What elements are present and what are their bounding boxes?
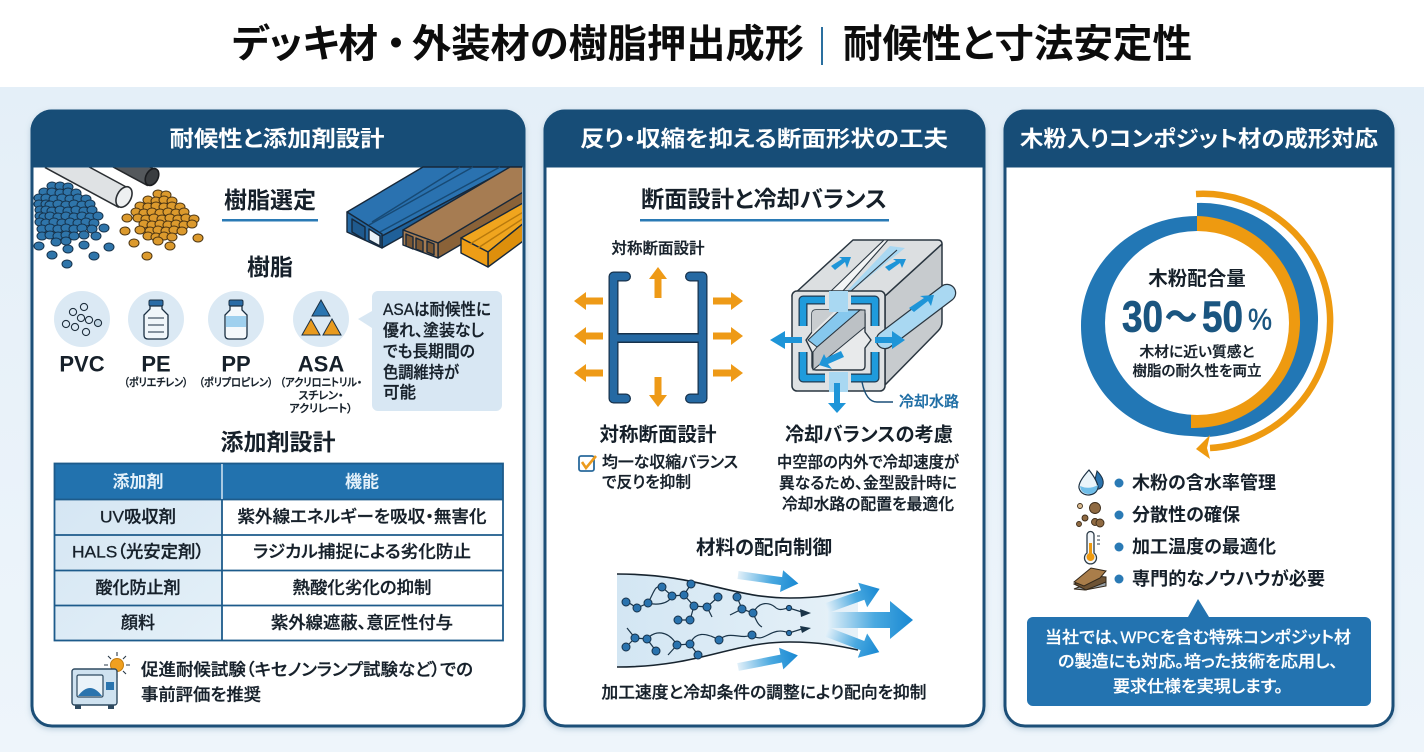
icon: ASA triangles: スチレン・ — [298, 389, 343, 402]
header: panel 3 — [1005, 111, 1393, 166]
table header: 添加剤 — [112, 472, 164, 492]
text: symmetric section note: で反りを抑制 — [602, 474, 691, 492]
label: cooling water channel — [862, 382, 959, 410]
title: left part — [232, 22, 804, 66]
title: left part: ・ — [386, 24, 406, 66]
label: PE: PE — [141, 352, 171, 376]
text: weathering test recommendation: 促進耐候試験（キセノンランプ試験など）での — [141, 660, 473, 680]
illustration: blue resin pellets — [34, 182, 114, 268]
row: antioxidant: 熱酸化劣化の抑制 — [292, 578, 432, 598]
heading: material orientation control: 材料の配向制御 — [696, 537, 832, 559]
text: ring note: 木材に近い質感と — [1140, 343, 1254, 361]
panel: wood plastic composite — [1005, 111, 1393, 726]
text: weathering test recommendation: 事前評価を推奨 — [141, 686, 261, 704]
icon: PP bottle: （ポリプロピレン） — [199, 376, 273, 389]
icon: ASA triangles: アクリレート） — [289, 402, 353, 415]
text: cooling balance note: 冷却水路の配置を最適化 — [782, 496, 954, 514]
label: PP: PP — [221, 352, 251, 376]
icon: PE bottle: （ポリエチレン） — [124, 376, 188, 389]
text: dispersion: 分散性の確保 — [1132, 505, 1240, 525]
value: 30 to 50 percent: 50 — [1202, 292, 1243, 342]
label: ASA: ASA — [298, 352, 344, 376]
heading: resin: 樹脂 — [247, 254, 293, 280]
chart: wood content ring — [1081, 194, 1330, 459]
title: left part: 外装材の樹脂押出成形 — [412, 24, 804, 66]
text: ring note — [1132, 343, 1262, 380]
icon: check — [579, 456, 596, 471]
row: HALS — [72, 542, 471, 562]
text: ring label: 木粉配合量 — [1148, 268, 1246, 290]
label: cooling water channel: 冷却水路 — [899, 394, 959, 410]
text: symmetric section note: 均一な収縮バランス — [602, 454, 738, 472]
illustration: extruded profiles — [347, 167, 530, 267]
text: orientation note: 加工速度と冷却条件の調整により配向を抑制 — [602, 683, 926, 702]
arrows: cooling flow — [770, 257, 934, 413]
title: right part: 耐候性と寸法安定性 — [843, 24, 1192, 66]
row: pigment: 顔料 — [121, 614, 155, 632]
row: UV absorber: 紫外線エネルギーを吸収・無害化 — [238, 508, 486, 526]
list: key points — [1074, 470, 1325, 590]
text: cooling balance note: 中空部の内外で冷却速度が — [777, 452, 959, 472]
diagram: cooling channel block — [792, 240, 947, 392]
value: 30 to 50 percent: 〜 — [1165, 296, 1197, 338]
heading: symmetric section design: 対称断面設計 — [599, 423, 717, 446]
heading: section design and cooling balance: 断面設計と冷却バランス — [641, 186, 887, 212]
arrow: orange outer arc — [1196, 194, 1330, 459]
callout: company capability: の製造にも対応。培った技術を応用し、 — [1058, 652, 1338, 671]
row: UV absorber — [100, 508, 486, 526]
icon: particles — [1076, 502, 1104, 527]
illustration: orange resin pellets — [120, 190, 203, 260]
value: 30 to 50 percent: 30 — [1122, 292, 1163, 342]
heading: additive design: 添加剤設計 — [220, 429, 336, 455]
text: know-how: 専門的なノウハウが必要 — [1132, 568, 1325, 589]
row: antioxidant — [96, 578, 432, 598]
panel: cross-section design — [545, 111, 984, 726]
icon: composite boards — [1074, 568, 1106, 590]
illustration: resin rods — [50, 150, 162, 210]
icon: PVC — [54, 291, 110, 376]
callout: company capability: 当社では、WPCを含む特殊コンポジット材 — [1045, 628, 1351, 647]
header: panel 1 — [32, 111, 524, 166]
table: additives — [54, 464, 503, 641]
row: UV absorber: UV吸収剤 — [100, 508, 176, 526]
callout: ASA note: でも長期間の — [383, 342, 475, 361]
text: symmetric section note — [602, 454, 738, 492]
header: panel 2 — [545, 111, 984, 166]
arrows: shrinkage directions — [574, 267, 743, 407]
callout: ASA note: 可能 — [383, 383, 416, 402]
arrows: material flow — [736, 564, 913, 678]
text: cooling balance note — [777, 452, 959, 514]
text: cooling balance note: 異なるため、金型設計時に — [779, 474, 957, 492]
icon: water drops — [1079, 470, 1103, 495]
icon: PE bottle — [124, 291, 188, 389]
callout: ASA note — [358, 291, 502, 411]
text: ring note: 樹脂の耐久性を両立 — [1132, 363, 1262, 380]
diagram: symmetric H profile — [613, 276, 703, 398]
table header — [112, 472, 379, 492]
text: moisture management: 木粉の含水率管理 — [1132, 472, 1276, 493]
icon: PP bottle — [199, 291, 273, 389]
row: HALS: ラジカル捕捉による劣化防止 — [253, 542, 471, 562]
header: panel 3: 木粉入りコンポジット材の成形対応 — [1020, 126, 1378, 152]
text: weathering test recommendation — [141, 660, 473, 704]
row: antioxidant: 酸化防止剤 — [96, 578, 180, 598]
icon: ASA triangles: （アクリロニトリル・ — [280, 376, 362, 389]
callout: company capability: 要求仕様を実現します。 — [1113, 677, 1283, 696]
callout: ASA note: 優れ、塗装なし — [383, 321, 484, 340]
callout: ASA note: 色調維持が — [383, 362, 460, 382]
row: HALS: HALS（光安定剤） — [72, 542, 204, 562]
panel: weather resistance and additive design — [32, 111, 530, 726]
heading: cooling balance: 冷却バランスの考慮 — [785, 424, 953, 446]
icon: thermometer — [1084, 532, 1100, 564]
icon: xenon weathering chamber — [72, 652, 130, 709]
title: left part: デッキ材 — [232, 22, 378, 66]
value: 30 to 50 percent: % — [1248, 304, 1272, 336]
icon: ASA triangles — [280, 291, 362, 415]
table header: 機能 — [345, 472, 379, 492]
diagram: material orientation flow — [617, 574, 858, 667]
title band — [0, 0, 1424, 87]
row: pigment — [121, 614, 453, 632]
callout: ASA note: ASAは耐候性に — [383, 300, 491, 319]
callout: company capability — [1027, 599, 1371, 706]
value: 30 to 50 percent — [1122, 292, 1272, 342]
header: panel 2: 反り・収縮を抑える断面形状の工夫 — [580, 126, 948, 152]
row: pigment: 紫外線遮蔽、意匠性付与 — [271, 614, 453, 632]
heading: resin selection: 樹脂選定 — [224, 187, 316, 213]
text: temperature: 加工温度の最適化 — [1132, 537, 1276, 557]
label: PVC: PVC — [59, 352, 105, 376]
header: panel 1: 耐候性と添加剤設計 — [170, 126, 384, 152]
label: symmetric section: 対称断面設計 — [611, 240, 705, 258]
